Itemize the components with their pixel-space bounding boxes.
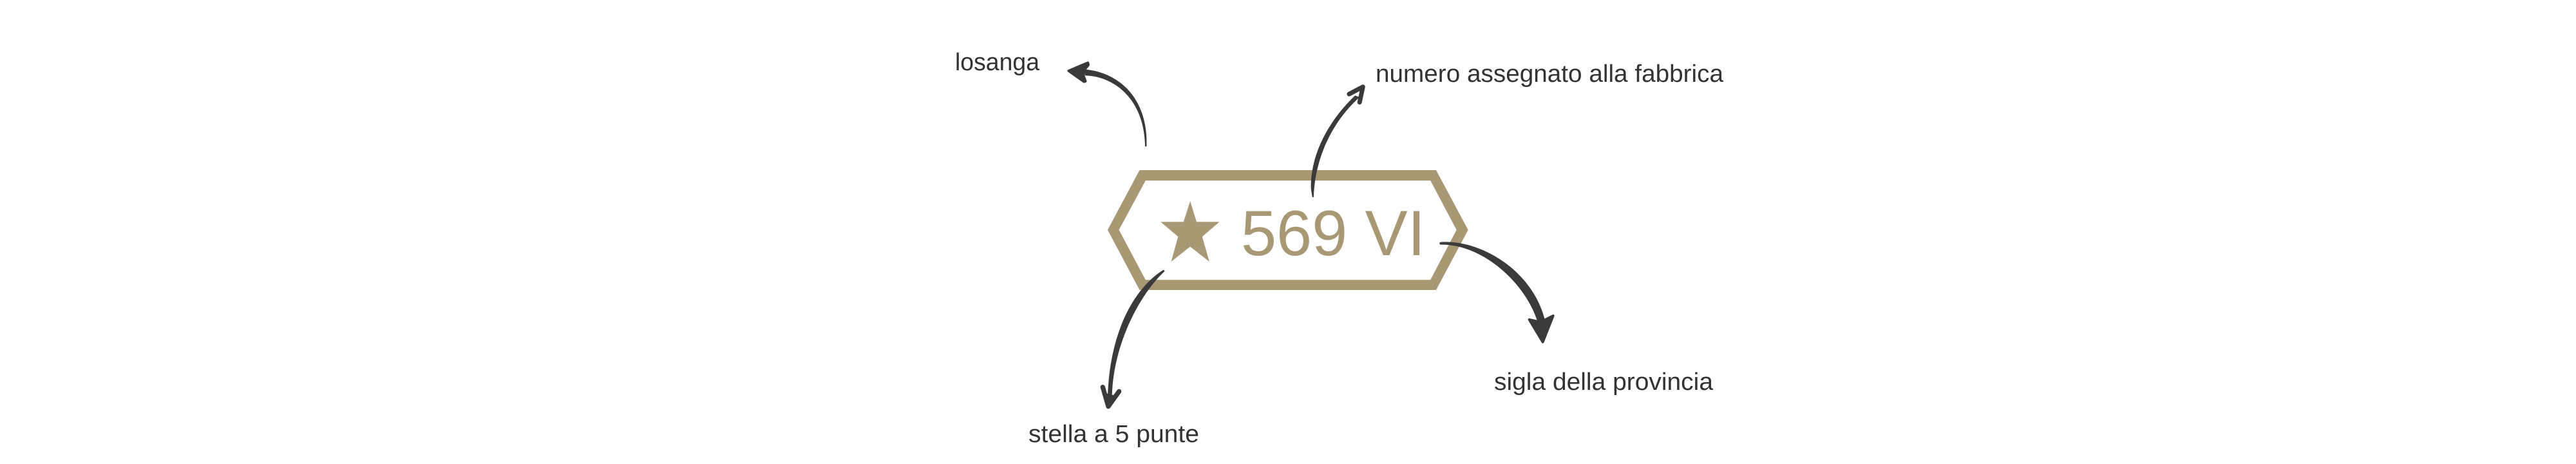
label: numero assegnato alla fabbrica: numero assegnato alla fabbrica [1376, 61, 1724, 88]
arrow: from star [1103, 270, 1165, 407]
panel: hexagonal plate [1108, 170, 1468, 290]
arrow: to province code [1439, 242, 1553, 342]
icon: five-point star [1160, 201, 1220, 262]
label: losanga: losanga [955, 49, 1040, 76]
label: stella a 5 punte: stella a 5 punte [1028, 421, 1199, 448]
plate number text: 569 VI [1241, 197, 1425, 269]
arrow: to losanga [1069, 63, 1147, 146]
label: sigla della provincia: sigla della provincia [1494, 369, 1714, 396]
arrow: to factory number [1311, 87, 1363, 197]
